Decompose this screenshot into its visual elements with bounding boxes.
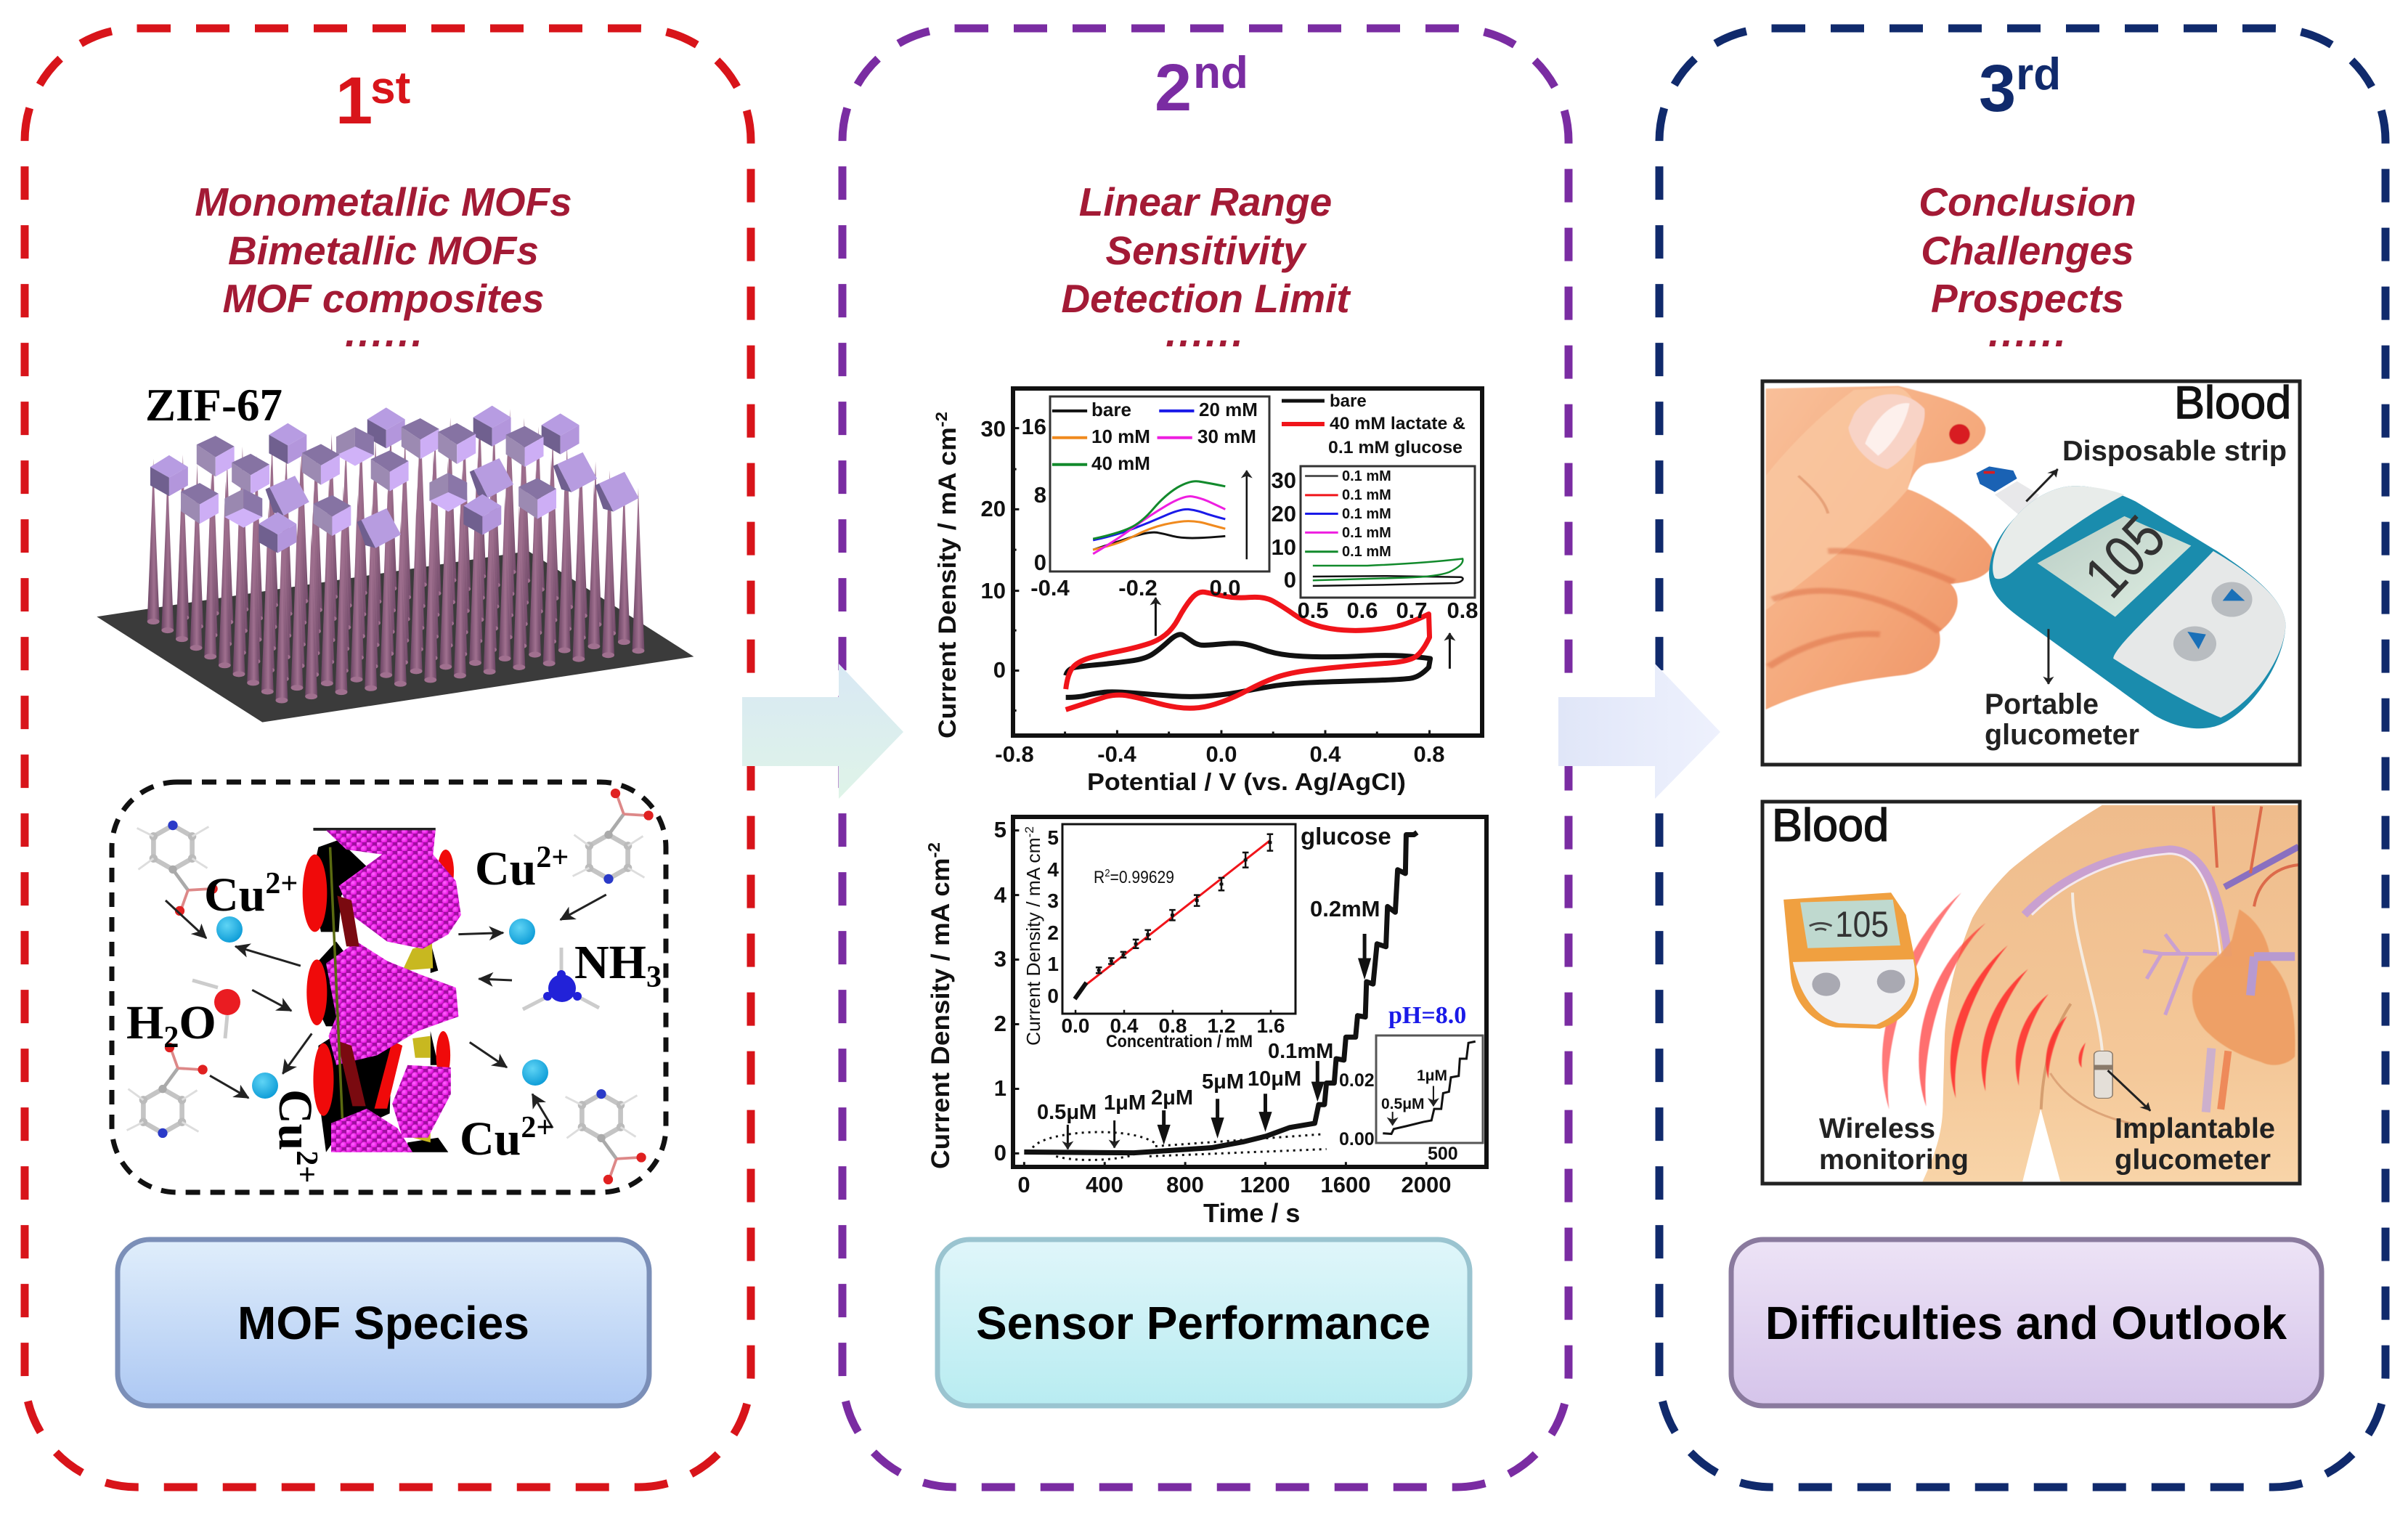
inset: low potential: 10 mM (1091, 426, 1150, 447)
label: pH: pH=8.0 (1388, 1002, 1466, 1029)
wireless monitor device (1783, 892, 1919, 1029)
heading: 3rd: rd (2016, 49, 2061, 99)
label: ZIF-67: ZIF-67 (145, 380, 282, 431)
inset: calibration line: 1.2 (1208, 1014, 1235, 1037)
photo labels: Portable (1985, 688, 2099, 720)
axes labels: 0 (994, 1140, 1006, 1165)
heading: 3rd: 3 (1979, 52, 2016, 126)
illustration: dashed box MOF degradation (112, 782, 666, 1192)
inset: high potential: 0.1 mM (1342, 544, 1391, 560)
heading: 2nd: 2 (1155, 51, 1192, 125)
axes labels: 20 (981, 496, 1006, 521)
step labels: 0.1mM (1268, 1040, 1333, 1063)
inset: calibration line: 0.8 (1159, 1014, 1187, 1037)
inset: calibration line: 3 (1047, 890, 1059, 912)
inset: high potential: 0.1 mM (1342, 506, 1391, 522)
main legend text: bare (1330, 391, 1367, 411)
axes labels: -0.4 (1097, 741, 1136, 767)
meter reading: 105 (2071, 502, 2178, 610)
chemical labels: Cu (475, 842, 536, 895)
device reading: 105 (1835, 904, 1889, 945)
inset: low potential: 40 mM (1091, 452, 1150, 474)
axes labels: Current Density / mA cm (934, 452, 961, 738)
water molecule (192, 980, 240, 1038)
inset: high potential: 30 (1272, 468, 1296, 493)
inset: high potential: 0.1 mM (1342, 468, 1391, 484)
axes labels: -0.8 (995, 741, 1034, 767)
chemical labels: Cu (204, 868, 265, 921)
MOF column (303, 828, 461, 1152)
photo panel: blood glucometer (1762, 378, 2300, 765)
text block: outlook topics: Conclusion (1919, 179, 2136, 224)
inset: high potential: 0.1 mM (1342, 525, 1391, 541)
inset: low concentration steps: 1μM (1417, 1067, 1447, 1084)
inset: calibration line: =0.99629 (1110, 868, 1174, 887)
photo labels: glucometer (1985, 719, 2139, 751)
step labels: 10μM (1248, 1067, 1301, 1091)
chemical labels (126, 841, 662, 1183)
chemical labels: Cu (460, 1112, 521, 1165)
inset: low potential: 8 (1034, 482, 1046, 508)
inset: calibration line: 1.6 (1257, 1014, 1285, 1037)
text block: MOF types: ...... (345, 310, 425, 355)
step labels: 0.2mM (1310, 896, 1380, 921)
photo frame (1762, 381, 2300, 765)
step labels: glucose (1301, 823, 1391, 850)
hand (1766, 386, 1993, 709)
photo labels: Blood (1772, 800, 1889, 851)
inset: calibration line: 1 (1047, 953, 1059, 975)
arrow: first to second section (742, 664, 903, 799)
inset: high potential: 0 (1284, 567, 1296, 593)
inset: low potential: bare (1091, 399, 1131, 420)
axes labels: 0 (1017, 1172, 1030, 1197)
text block: outlook topics: Prospects (1931, 276, 2124, 321)
illustration: ZIF-67 nanoneedle array (97, 380, 693, 723)
axes labels: 10 (981, 578, 1006, 603)
inset: calibration line: 0.4 (1110, 1014, 1139, 1037)
caption box: Difficulties and Outlook (1731, 1240, 2322, 1406)
substrate and needles with cubes (97, 406, 693, 723)
main legend text: 0.1 mM glucose (1328, 438, 1463, 457)
inset: low potential: -0.2 (1118, 575, 1158, 601)
text block: performance metrics (1061, 179, 1351, 355)
torso (1922, 805, 2298, 1181)
axes labels: 2 (994, 1011, 1006, 1036)
inset: low potential: 16 (1022, 414, 1046, 439)
axes labels: Current Density / mA cm (927, 874, 955, 1169)
inset: high potential: 0.5 (1297, 598, 1329, 623)
chemical labels: 2+ (265, 867, 298, 900)
text block: performance metrics: Linear Range (1079, 179, 1332, 224)
inset: low potential: 0.0 (1209, 575, 1241, 601)
axes labels: 0.4 (1309, 741, 1341, 767)
axes labels: 1600 (1321, 1172, 1370, 1197)
chart frame (1013, 817, 1486, 1167)
main legend text: 40 mM lactate & (1330, 414, 1465, 434)
inset: high potential: 20 (1272, 501, 1296, 526)
axes labels: Potential / V (vs. Ag/AgCl) (1087, 768, 1406, 795)
caption box: Sensor Performance: Sensor Performance (976, 1297, 1431, 1349)
axes labels (932, 412, 1445, 795)
dashed frame (112, 782, 666, 1192)
axes labels: 1200 (1240, 1172, 1290, 1197)
chart: cyclic voltammetry (932, 388, 1482, 795)
inset: high potential (1272, 466, 1478, 623)
axes labels (924, 817, 1451, 1228)
chart frame (1013, 388, 1482, 736)
copper ions (216, 916, 548, 1099)
text block: outlook topics: Challenges (1921, 228, 2134, 273)
text block: MOF types: Monometallic MOFs (195, 179, 572, 224)
heading: 1st: st (370, 63, 410, 113)
chemical labels: Cu (269, 1089, 322, 1150)
step labels: 0.00 (1339, 1129, 1375, 1149)
main legend text (1328, 391, 1465, 457)
caption box: Difficulties and Outlook: Difficulties and Outlook (1765, 1297, 2287, 1349)
curves and ticks (1013, 401, 1449, 736)
chemical labels: 3 (646, 961, 662, 994)
caption box: Sensor Performance (937, 1240, 1470, 1406)
inset: calibration line: -2 (1022, 826, 1036, 837)
axes labels: 0.0 (1205, 741, 1237, 767)
inset: high potential: 0.8 (1447, 598, 1478, 623)
inset: calibration line: 2 (1105, 867, 1110, 879)
inset: low potential: -0.4 (1030, 575, 1070, 601)
inset: low concentration steps (1376, 1035, 1483, 1143)
text block: performance metrics: Detection Limit (1061, 276, 1351, 321)
axes labels: Time / s (1203, 1198, 1300, 1228)
step labels: 0.5μM (1037, 1101, 1097, 1124)
panel: first section border (25, 28, 751, 1487)
text block: outlook topics: ...... (1988, 310, 2068, 355)
reaction arrows (166, 895, 606, 1128)
inset: calibration line: 0.0 (1062, 1014, 1089, 1037)
step labels: 5μM (1202, 1070, 1244, 1094)
heading: 2nd: nd (1193, 48, 1248, 98)
arrow: second to third section (1558, 664, 1720, 799)
chemical labels: 2+ (290, 1150, 323, 1183)
photo labels: monitoring (1819, 1144, 1969, 1176)
inset: calibration line: 4 (1047, 858, 1059, 881)
axes labels: -2 (924, 842, 943, 858)
inset: low potential (1022, 396, 1269, 601)
inset: high potential: 0.1 mM (1342, 487, 1391, 503)
photo labels (1772, 800, 2275, 1176)
axes labels: 4 (994, 882, 1007, 908)
inset: high potential: 10 (1272, 534, 1296, 560)
text block: performance metrics: Sensitivity (1105, 228, 1307, 273)
photo labels: Disposable strip (2062, 436, 2287, 467)
axes labels: 400 (1086, 1172, 1123, 1197)
photo labels: glucometer (2115, 1144, 2271, 1176)
chemical labels: 2 (163, 1021, 179, 1054)
text block: performance metrics: ...... (1166, 310, 1245, 355)
text block: MOF types: MOF composites (222, 276, 545, 321)
axes labels: 2000 (1402, 1172, 1451, 1197)
inset: low concentration steps: 0.5μM (1381, 1096, 1425, 1112)
chemical labels: 2+ (521, 1111, 553, 1144)
ammonia molecule (523, 948, 599, 1009)
text block: MOF types (195, 179, 572, 355)
inset: low potential: 0 (1034, 550, 1046, 575)
heading: 1st: 1 (335, 64, 373, 138)
inset: low potential: 30 mM (1197, 426, 1256, 447)
axes labels: 1 (994, 1075, 1006, 1101)
photo labels: Blood (2174, 378, 2291, 428)
inset: calibration line: R (1094, 868, 1106, 887)
axes labels: 0 (993, 657, 1006, 683)
step labels: 500 (1428, 1144, 1458, 1164)
chemical labels: O (179, 996, 216, 1049)
photo labels: Wireless (1819, 1113, 1935, 1144)
text block: MOF types: Bimetallic MOFs (228, 228, 539, 273)
chart: amperometric response (924, 817, 1486, 1228)
step labels (1037, 823, 1458, 1164)
inset: calibration line: Current Density / mA cm (1022, 841, 1044, 1046)
inset: calibration line: 2 (1047, 921, 1059, 944)
chemical labels: NH (574, 936, 646, 989)
inset: calibration line (1022, 824, 1295, 1051)
inset: low potential: 20 mM (1199, 399, 1258, 420)
glucometer (1976, 466, 2285, 728)
axes labels: 5 (994, 817, 1006, 842)
inset: calibration line: 0 (1047, 985, 1059, 1007)
caption box: MOF Species (118, 1240, 649, 1406)
axes labels: 0.8 (1413, 741, 1445, 767)
text block: outlook topics (1919, 179, 2136, 355)
inset: calibration line: Concentration / mM (1106, 1032, 1253, 1051)
axes labels: 30 (981, 416, 1006, 441)
photo labels (1985, 378, 2291, 751)
inset: calibration line: 5 (1047, 826, 1059, 849)
inset: high potential: 0.7 (1396, 598, 1428, 623)
wireless signal arcs (1882, 892, 2086, 1110)
molecules (127, 789, 654, 1184)
panel: third section border (1659, 28, 2385, 1487)
panel: second section border (842, 28, 1569, 1487)
axes labels: 800 (1166, 1172, 1204, 1197)
chemical labels: H (126, 996, 163, 1049)
axes labels: 3 (994, 946, 1006, 972)
step labels: 1μM (1104, 1091, 1146, 1115)
chemical labels: 2+ (536, 841, 569, 874)
photo frame (1762, 802, 2300, 1184)
step curve, ticks and arrows (1013, 831, 1426, 1167)
step labels: 2μM (1151, 1086, 1193, 1110)
step labels: 0.02 (1339, 1070, 1375, 1091)
photo labels: Implantable (2115, 1113, 2275, 1144)
inset: high potential: 0.6 (1346, 598, 1378, 623)
axes labels: -2 (932, 412, 951, 427)
caption box: MOF Species: MOF Species (237, 1297, 529, 1349)
photo panel: implantable glucometer (1762, 800, 2300, 1184)
